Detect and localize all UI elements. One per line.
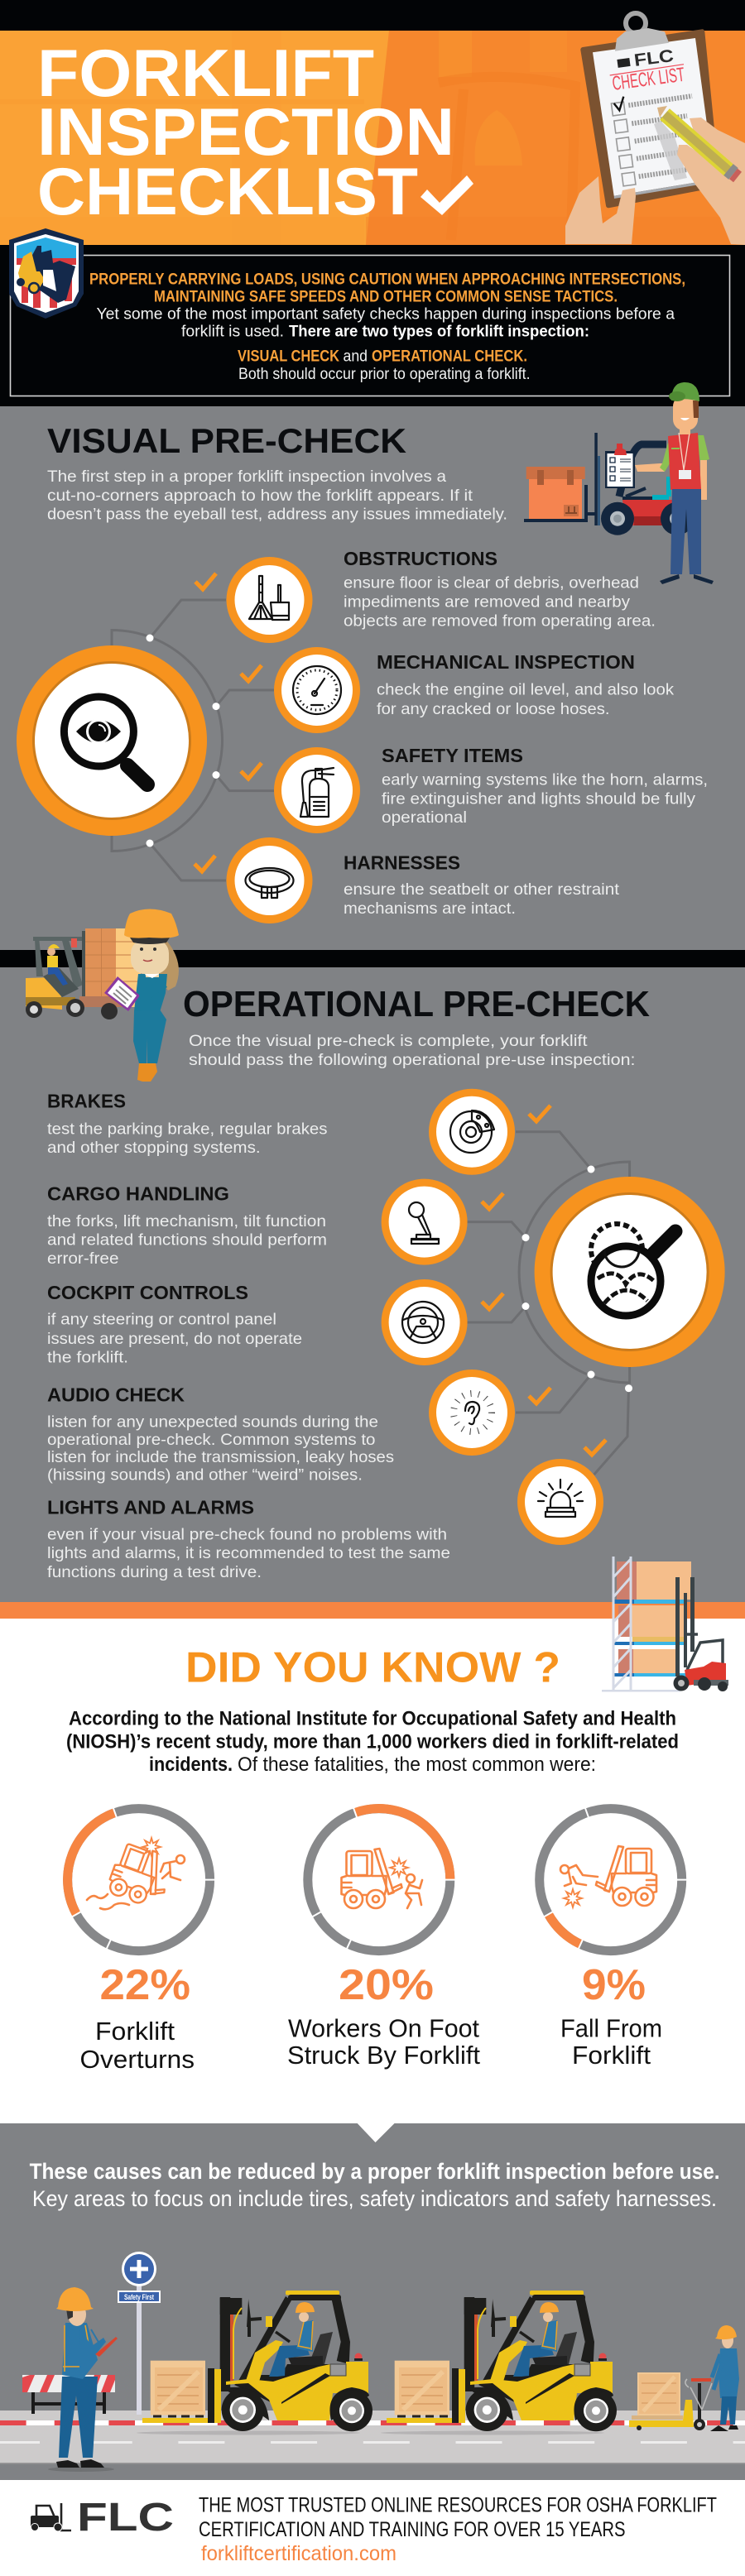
footer logo: FLC — [77, 2496, 174, 2540]
text: brakes — [47, 1090, 328, 1157]
icon: clipboard held in hands: FLC — [633, 46, 675, 70]
text: audio check: listen for include the transmission, leaky hoses — [47, 1448, 394, 1466]
percentage: 20% — [339, 1961, 434, 2009]
intro text: There are two types of forklift inspection: — [289, 324, 589, 341]
text: lights and alarms: LIGHTS AND ALARMS — [47, 1496, 254, 1518]
intro text: forklift is used. — [181, 324, 284, 341]
footer text — [199, 2494, 717, 2565]
panel: hero banner — [0, 31, 745, 245]
percentage: 9% — [582, 1961, 646, 2009]
check mark — [195, 573, 216, 589]
icon row: audio check — [429, 1370, 550, 1456]
illustration: warehouse rack with red forklift — [602, 1557, 728, 1691]
icon: beacon — [517, 1459, 603, 1545]
heading: MECHANICAL INSPECTION — [377, 651, 635, 673]
text: visual intro — [47, 468, 507, 524]
text: cargo handling: and related functions should perform — [47, 1231, 327, 1250]
orange divider — [0, 1602, 745, 1619]
intro text — [89, 271, 685, 383]
item: mechanical inspection — [241, 647, 674, 733]
text: cargo handling: CARGO HANDLING — [47, 1183, 229, 1205]
icon: magnifier with eye — [17, 645, 207, 836]
description: impediments are removed and nearby — [344, 592, 630, 611]
text: visual intro: doesn’t pass the eyeball test, address any issues immediately. — [47, 506, 507, 524]
text: cargo handling — [47, 1183, 327, 1268]
label: Struck By Forklift — [287, 2041, 480, 2070]
label: Forklift — [572, 2041, 651, 2070]
check mark — [584, 1440, 606, 1455]
title — [37, 36, 473, 229]
text: brakes: BRAKES — [47, 1090, 126, 1111]
panel: visual pre-check — [0, 406, 745, 1602]
text: niosh study: incidents. — [149, 1753, 233, 1776]
intro text: Yet some of the most important safety checks happen during inspections before a — [96, 306, 675, 323]
text: visual intro: cut-no-corners approach to how the forklift appears. If it — [47, 487, 473, 505]
label: Fall From — [560, 2014, 662, 2042]
heading: did you know: DID YOU KNOW ? — [185, 1643, 560, 1691]
text: cockpit controls: the forklift. — [47, 1349, 128, 1367]
icon: clipboard held in hands — [565, 13, 745, 245]
icon row: cockpit controls — [382, 1279, 503, 1365]
title: FORKLIFT — [37, 36, 374, 111]
description: objects are removed from operating area. — [344, 612, 656, 631]
description: ensure the seatbelt or other restraint — [344, 880, 620, 899]
icon: broom and dustpan — [227, 557, 313, 643]
stat: forklift overturns — [68, 1807, 216, 2074]
title: INSPECTION — [37, 95, 454, 170]
text: operational intro: Once the visual pre-check is complete, your forklift — [189, 1032, 588, 1050]
intro text: OPERATIONAL CHECK. — [372, 348, 527, 366]
icon: worker falling from forklift — [560, 1846, 656, 1907]
text: cargo handling: the forks, lift mechanism, tilt function — [47, 1212, 326, 1230]
illustration: forklift 1 — [137, 2291, 372, 2434]
text: niosh study — [66, 1708, 679, 1776]
text: lights and alarms: lights and alarms, it is recommended to test the same — [47, 1544, 450, 1562]
icon: gauge — [274, 647, 360, 733]
description: ensure floor is clear of debris, overhead — [344, 574, 639, 592]
icon: shield logo — [9, 228, 84, 319]
divider bar — [0, 950, 745, 967]
icon: safety first sign: Safety First — [124, 2293, 154, 2301]
text: audio check: listen for any unexpected sounds during the — [47, 1413, 378, 1432]
description — [344, 880, 620, 918]
check mark — [482, 1193, 503, 1209]
donut chart — [308, 1807, 456, 1951]
text: brakes: and other stopping systems. — [47, 1139, 261, 1157]
text: operational intro: should pass the following operational pre-use inspection: — [189, 1051, 636, 1069]
text: cargo handling: error-free — [47, 1250, 119, 1268]
check mark — [241, 665, 262, 681]
description: for any cracked or loose hoses. — [377, 700, 609, 718]
icon: road barrier — [22, 2375, 115, 2414]
heading: visual pre-check: VISUAL PRE-CHECK — [47, 421, 406, 460]
icon row: brakes — [429, 1089, 550, 1175]
text: niosh study: (NIOSH)’s recent study, more than 1,000 workers died in forklift-related — [66, 1730, 679, 1753]
intro text: VISUAL CHECK — [238, 348, 339, 366]
icon: fire extinguisher — [274, 747, 360, 833]
check mark — [241, 763, 262, 779]
description: mechanisms are intact. — [344, 899, 516, 918]
illustration: woman with yellow forklift — [26, 909, 179, 1082]
description: fire extinguisher and lights should be fully — [382, 789, 695, 808]
text: cockpit controls — [47, 1282, 302, 1367]
percentage: 22% — [99, 1961, 190, 2009]
icon: harness belt — [227, 837, 313, 923]
label — [79, 2017, 195, 2074]
stat: workers on foot — [287, 1807, 480, 2070]
illustration: worker with clipboard — [48, 2287, 118, 2472]
footer logo — [31, 2496, 174, 2540]
description: operational — [382, 808, 467, 827]
text: cockpit controls: COCKPIT CONTROLS — [47, 1282, 248, 1303]
icon: magnifier with gears — [535, 1177, 725, 1367]
heading: OBSTRUCTIONS — [344, 548, 497, 569]
title: CHECKLIST — [37, 155, 418, 229]
intro text: MAINTAINING SAFE SPEEDS AND OTHER COMMON SENSE TACTICS. — [154, 288, 618, 306]
illustration: forklift 2 — [381, 2291, 617, 2434]
text: cockpit controls: if any steering or control panel — [47, 1311, 276, 1329]
icon: gear stick — [382, 1179, 468, 1265]
text: audio check: (hissing sounds) and other “weird” noises. — [47, 1466, 363, 1485]
heading: operational pre-check: OPERATIONAL PRE-CHECK — [183, 984, 650, 1024]
icon: overturning forklift — [87, 1838, 185, 1911]
diagram connectors: operational — [467, 1132, 632, 1475]
label: Forklift — [95, 2017, 175, 2046]
description: early warning systems like the horn, alarms, — [382, 771, 708, 789]
icon: safety first sign — [118, 2252, 161, 2415]
text: cockpit controls: issues are present, do not operate — [47, 1330, 302, 1348]
footer text: CERTIFICATION AND TRAINING FOR OVER 15 YEARS — [199, 2518, 626, 2541]
icon row: cargo handling — [382, 1179, 503, 1265]
label: Workers On Foot — [288, 2014, 479, 2042]
label — [287, 2014, 480, 2070]
icon: brake disc — [429, 1089, 515, 1175]
check mark — [195, 856, 215, 871]
icon: forklift striking worker — [341, 1849, 422, 1908]
top black strip — [0, 0, 745, 31]
illustration: worker with pallet truck — [629, 2325, 739, 2431]
footer text: forkliftcertification.com — [201, 2542, 397, 2565]
intro text: and — [343, 348, 368, 366]
label: Overturns — [79, 2045, 195, 2074]
item: obstructions — [195, 548, 656, 643]
description: check the engine oil level, and also look — [377, 680, 674, 698]
text: audio check: operational pre-check. Common systems to — [47, 1431, 376, 1449]
description — [377, 680, 674, 718]
check mark — [529, 1106, 550, 1121]
label — [560, 2014, 662, 2070]
text: operational intro — [189, 1032, 636, 1069]
stat: fall from forklift — [540, 1807, 688, 2070]
donut chart — [540, 1807, 688, 1951]
text: audio check: AUDIO CHECK — [47, 1384, 185, 1405]
text: audio check — [47, 1384, 394, 1485]
illustration: worker with red forklift — [524, 382, 714, 584]
text: niosh study: According to the National Institute for Occupational Safety and Health — [69, 1708, 676, 1730]
text: lights and alarms — [47, 1496, 450, 1581]
heading: HARNESSES — [344, 852, 460, 874]
intro text: Both should occur prior to operating a forklift. — [238, 366, 530, 383]
icon: clipboard held in hands: CHECK LIST — [611, 64, 686, 95]
icon row: lights and alarms — [517, 1440, 606, 1545]
description — [382, 771, 708, 827]
text: visual intro: The first step in a proper forklift inspection involves a — [47, 468, 446, 486]
item: harnesses — [195, 837, 620, 923]
check mark — [529, 1388, 550, 1403]
text: lights and alarms: functions during a test drive. — [47, 1563, 262, 1581]
text: closing message — [30, 2159, 720, 2211]
donut chart — [68, 1807, 216, 1951]
description — [344, 574, 656, 631]
item: safety items — [241, 745, 708, 833]
check mark — [482, 1293, 503, 1309]
panel: closing grey section — [0, 2123, 745, 2480]
heading: SAFETY ITEMS — [382, 745, 523, 766]
icon: steering wheel — [382, 1279, 468, 1365]
text: lights and alarms: even if your visual pre-check found no problems with — [47, 1526, 447, 1544]
icon: ear with sound rays — [429, 1370, 515, 1456]
road — [0, 2411, 745, 2464]
panel: intro black section — [0, 245, 745, 406]
diagram connectors: visual — [112, 600, 274, 880]
text: niosh study: Of these fatalities, the most common were: — [238, 1753, 596, 1776]
text: brakes: test the parking brake, regular brakes — [47, 1120, 328, 1139]
